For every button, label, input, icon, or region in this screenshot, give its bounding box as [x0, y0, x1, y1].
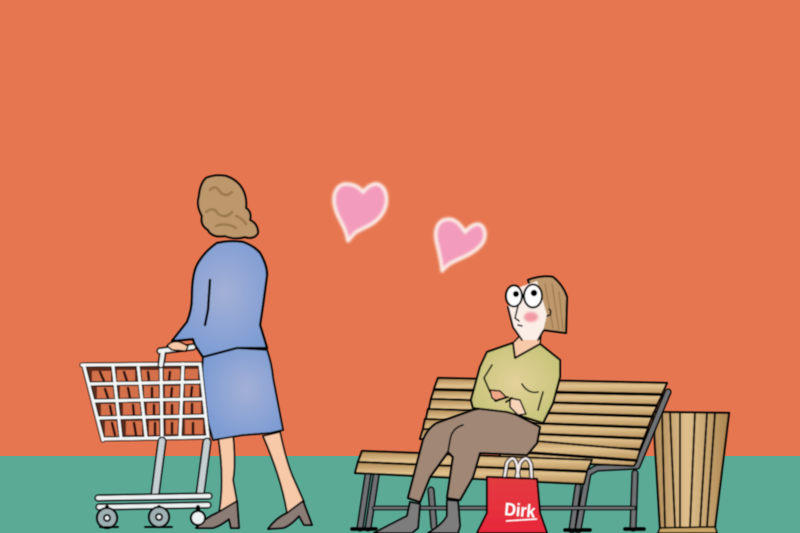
cart handle — [160, 347, 193, 365]
bench — [352, 378, 668, 530]
cart wheels — [97, 507, 205, 528]
legs — [218, 432, 304, 513]
cart basket — [82, 364, 208, 440]
bag label: Dirk — [504, 499, 537, 522]
trash can — [653, 412, 729, 533]
heart: large — [334, 184, 387, 241]
shopping bag — [477, 458, 547, 533]
jacket — [172, 241, 267, 357]
hair back — [528, 276, 567, 333]
bench seat — [355, 451, 592, 484]
bench frame — [352, 392, 668, 530]
trousers — [408, 407, 540, 502]
shoes — [196, 501, 312, 529]
boots — [374, 500, 460, 533]
face — [508, 281, 547, 340]
eyes — [506, 284, 542, 308]
neck — [513, 332, 541, 358]
hair — [198, 175, 258, 238]
ground — [0, 456, 800, 533]
hand — [167, 342, 188, 351]
seated woman — [374, 276, 567, 533]
skirt — [202, 348, 283, 440]
heart: small — [436, 219, 485, 271]
bench back — [420, 378, 667, 466]
standing woman with shopping cart — [82, 175, 312, 529]
sweater — [471, 343, 560, 423]
cart — [82, 347, 209, 528]
cart frame — [155, 441, 207, 495]
hands — [490, 390, 506, 401]
